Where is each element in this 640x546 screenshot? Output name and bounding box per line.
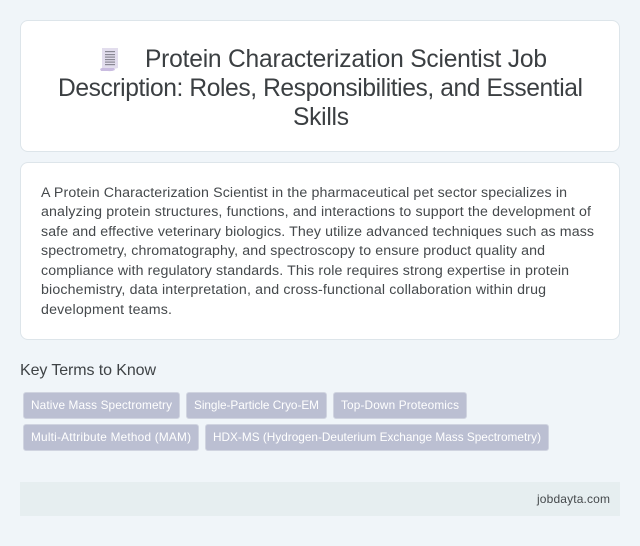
panel: title card — [20, 20, 620, 152]
tag labels: Native Mass Spectrometry — [31, 398, 172, 412]
text block: description: compliance with regulatory standards. This role requires strong expertise in protein — [41, 263, 569, 279]
text block: description: analyzing protein structures, functions, and interactions to support the development of — [41, 204, 591, 220]
tag labels: HDX-MS (Hydrogen-Deuterium Exchange Mass Spectrometry) — [213, 430, 541, 444]
tag: Multi-Attribute Method (MAM) — [23, 424, 199, 451]
heading: key terms: Key Terms to Know — [20, 362, 156, 379]
text block: description: spectrometry, chromatography, and spectroscopy to ensure product quality and — [41, 243, 545, 259]
title: Skills — [293, 104, 349, 131]
text block: description: safe and effective veterinary biologics. They utilize advanced techniques such as mass — [41, 224, 594, 240]
text block: description: biochemistry, data interpretation, and cross-functional collaboration within drug — [41, 282, 546, 298]
tag labels: Top-Down Proteomics — [341, 398, 459, 412]
footer bar — [20, 482, 620, 516]
tag: Native Mass Spectrometry — [23, 392, 180, 419]
tag: Single-Particle Cryo-EM — [186, 392, 327, 419]
tag labels: Multi-Attribute Method (MAM) — [31, 430, 191, 444]
tag labels: Single-Particle Cryo-EM — [194, 398, 319, 412]
panel: description card — [20, 162, 620, 340]
tag: HDX-MS — [205, 424, 549, 451]
tag: Top-Down Proteomics — [333, 392, 467, 419]
text block: description: development teams. — [41, 302, 172, 318]
title: Description: Roles, Responsibilities, and Essential — [58, 75, 583, 102]
text block: description: A Protein Characterization Scientist in the pharmaceutical pet sector specializes in — [41, 185, 567, 201]
title: Protein Characterization Scientist Job — [145, 46, 547, 73]
footer text: jobdayta.com — [536, 492, 610, 506]
